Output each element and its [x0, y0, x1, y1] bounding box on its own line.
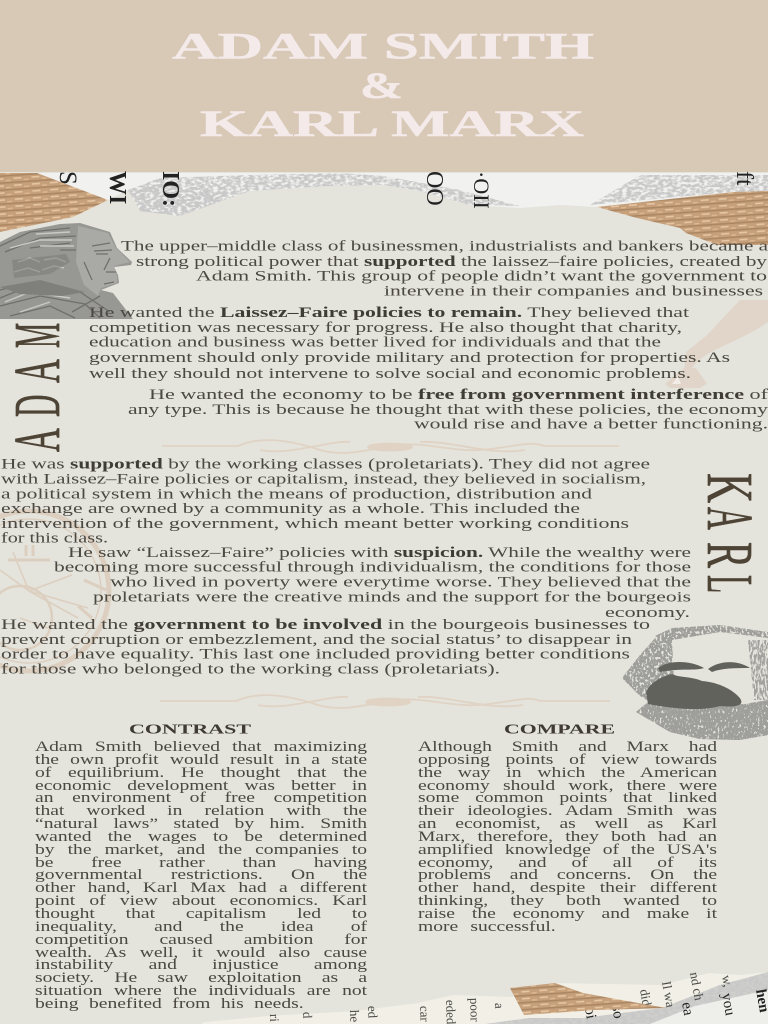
text column: compare: economy, and of all of its	[418, 855, 717, 871]
text column: compare: opposing points of view towards	[418, 752, 717, 768]
text column: contrast: the own profit would result in a state	[35, 752, 367, 768]
vertical label: ADAM	[1, 323, 74, 452]
text column: compare: more successful.	[418, 919, 556, 935]
text column: contrast: of equilibrium. He thought that the	[35, 765, 367, 781]
heading: contrast: CONTRAST	[129, 722, 252, 738]
text column: contrast: economic development was better in	[35, 778, 367, 794]
text column: contrast: governmental restrictions. On the	[35, 867, 367, 883]
torn paper strip: bottom: poor	[467, 998, 483, 1023]
text column: contrast: being benefited from his needs.	[35, 996, 304, 1012]
torn paper strip: bottom: ed	[365, 1006, 380, 1019]
torn paper strip: top: WI	[104, 171, 130, 204]
text column: compare: problems and concerns. On the	[418, 867, 717, 883]
text column: contrast: be free rather than having	[35, 855, 367, 871]
text column: contrast: other hand, Karl Max had a different	[35, 880, 367, 896]
vertical label: ADAM: A	[2, 428, 74, 452]
vertical label: KARL: L	[693, 575, 766, 593]
text block: Adam free economy	[128, 387, 768, 432]
text block: Karl government: for those who belonged to the working class (proletariats).	[1, 662, 500, 678]
title line: Adam Smith: ADAM SMITH	[172, 26, 594, 68]
torn paper strip: top	[0, 171, 768, 216]
text column: contrast: Adam Smith believed that maximizing	[35, 739, 367, 755]
torn paper strip: top: ft	[731, 171, 757, 186]
torn paper strip: bottom: he	[347, 1010, 362, 1023]
text block: Adam free economy: He wanted the economy to be free from government interference of	[149, 387, 768, 403]
vertical label: KARL: R	[693, 542, 766, 569]
text block: Adam Laissez-Faire: education and business was better lived for individuals and that the	[89, 334, 661, 350]
burlap patch: bottom	[510, 983, 666, 1015]
text column: contrast: that worked in relation with the	[35, 803, 367, 819]
text column: contrast: “natural laws” stated by him. Smith	[35, 816, 367, 832]
text column: compare: economy should work, there were	[418, 778, 717, 794]
text block: Adam free economy: any type. This is because he thought that with these policies, the economy	[128, 402, 768, 418]
text block: Karl government: prevent corruption or embezzlement, and the social status’ to disappear in	[1, 632, 633, 648]
vertical label: KARL: K	[694, 473, 767, 503]
text column: compare: other hand, despite their different	[418, 880, 717, 896]
text column: contrast: inequality, and the idea of	[35, 919, 367, 935]
torn paper strip: bottom: so	[608, 1004, 626, 1020]
text block: Karl support: with Laissez–Faire policies or capitalism, instead, they believed in socialism,	[1, 472, 646, 488]
text column: contrast: instability and injustice among	[35, 957, 367, 973]
text block: Karl suspicion: He saw “Laissez–Faire” policies with suspicion. While the wealthy were	[68, 545, 691, 561]
portrait: Adam Smith	[0, 223, 133, 319]
text column: compare: amplified knowledge of the USA's	[418, 842, 717, 858]
vertical label: ADAM: M	[1, 323, 73, 348]
torn paper strip: top: ·OII	[469, 171, 494, 209]
text column: compare: thinking, they both wanted to	[418, 893, 717, 909]
torn paper strip: bottom: ea	[678, 1001, 696, 1017]
vertical label: ADAM: D	[1, 395, 74, 417]
text block: Adam intro	[121, 238, 768, 300]
text block: Adam Laissez-Faire: competition was necessary for progress. He also thought that charity,	[89, 320, 682, 336]
torn paper strip: bottom: car	[417, 1006, 433, 1023]
text block: Karl support	[1, 456, 650, 546]
text column: contrast: wanted the wages to be determined	[35, 829, 367, 845]
text column: compare: the way in which the American	[418, 765, 717, 781]
text column: compare: Although Smith and Marx had	[418, 739, 717, 755]
text column: contrast	[35, 739, 367, 1012]
title line: Karl Marx: KARL MARX	[200, 104, 584, 145]
text block: Adam intro: intervene in their companies and businesses	[384, 284, 764, 300]
text block: Karl support: for this class.	[1, 530, 108, 546]
text column: contrast: situation where the individuals are not	[35, 983, 367, 999]
text block: Adam Laissez-Faire: well they should not intervene to solve social and economic problems.	[89, 366, 691, 382]
text block: Karl suspicion: who lived in poverty were everytime worse. They believed that the	[110, 574, 691, 590]
vertical label: KARL	[693, 473, 767, 593]
torn paper strip: bottom: ri	[267, 1014, 282, 1022]
ornament divider: lower	[160, 695, 610, 708]
icon: pocket watch	[0, 511, 109, 671]
torn paper strip: bottom	[201, 971, 768, 1024]
ornament divider: upper	[162, 440, 619, 453]
text block: Karl support: exchange are owned by a community as a whole. This included the	[1, 501, 580, 517]
text block: Adam Laissez-Faire: He wanted the Laissez–Faire policies to remain. They believed that	[89, 305, 689, 321]
torn paper strip: bottom: eded	[443, 1000, 459, 1024]
text column: compare: their ideologies. Adam Smith was	[418, 803, 717, 819]
torn paper strip: bottom: nd ch	[687, 971, 707, 1002]
text block: Karl support: He was supported by the working classes (proletariats). They did not agree	[1, 456, 650, 472]
text column: contrast: by the market, and the companies to	[35, 842, 367, 858]
icon: feather and ink bottle	[665, 300, 768, 388]
torn paper strip: top: S	[54, 171, 81, 185]
text block: Karl government	[1, 617, 650, 678]
text column: compare: some common points that linked	[418, 790, 717, 806]
text block: Karl suspicion	[54, 545, 692, 621]
vertical label: ADAM: A	[2, 359, 74, 383]
title	[172, 26, 594, 145]
torn paper strip: top: OO	[421, 171, 447, 206]
text block: Adam intro: strong political power that supported the laissez–faire policies, created by	[136, 254, 768, 270]
torn paper strip: top: IO:	[157, 171, 183, 207]
heading: compare: COMPARE	[504, 722, 615, 738]
torn paper strip: bottom: d	[300, 1012, 315, 1019]
text block: Karl government: He wanted the government to be involved in the bourgeois businesses to	[1, 617, 650, 633]
torn paper strip: bottom: oi	[581, 1006, 599, 1020]
torn paper strip: bottom: a	[492, 1003, 507, 1009]
torn paper strip: bottom: you	[718, 992, 738, 1017]
text block: Karl support: intervention of the government, which meant better working conditions	[1, 516, 630, 532]
torn paper strip: bottom: w,	[719, 974, 736, 988]
torn paper strip: bottom: Il wa	[659, 980, 678, 1009]
text column: contrast: an environment of free competition	[35, 790, 367, 806]
text column: contrast: point of view about economics. Karl	[35, 893, 367, 909]
text column: contrast: wealth. As well, it would also cause	[35, 944, 367, 960]
portrait: Karl Marx	[622, 625, 768, 740]
burlap patch: top left	[0, 173, 108, 232]
text block: Karl suspicion: economy.	[605, 605, 690, 621]
header band	[0, 0, 768, 172]
burlap patch: top right	[597, 191, 768, 245]
text block: Karl support: a political system in which the means of production, distribution and	[1, 486, 593, 502]
text block: Adam intro: The upper–middle class of businessmen, industrialists and bankers became a	[121, 238, 768, 254]
text block: Karl suspicion: proletariats were the creative minds and the support for the bourgeois	[93, 590, 692, 606]
text column: compare: an economist, as well as Karl	[418, 816, 717, 832]
text column: compare: Marx, therefore, they both had an	[418, 829, 717, 845]
text column: contrast: thought that capitalism led to	[35, 906, 367, 922]
title ampersand: &	[360, 66, 403, 107]
text column: compare	[418, 739, 717, 935]
text block: Karl suspicion: becoming more successful through individualism, the conditions for those	[54, 560, 691, 576]
text column: compare: raise the economy and make it	[418, 906, 717, 922]
text block: Adam free economy: would rise and have a better functioning.	[414, 416, 768, 432]
vertical label: KARL: A	[693, 507, 765, 530]
text column: contrast: society. He saw exploitation as a	[35, 970, 367, 986]
text block: Adam intro: Adam Smith. This group of people didn’t want the government to	[196, 268, 767, 284]
torn paper strip: bottom: did	[637, 988, 655, 1007]
text block: Adam Laissez-Faire	[89, 305, 731, 382]
text block: Karl government: order to have equality. This last one included providing better conditions	[1, 646, 631, 662]
text column: contrast: competition caused ambition for	[35, 932, 367, 948]
text block: Adam Laissez-Faire: government should only provide military and protection for properties. As	[89, 350, 731, 366]
